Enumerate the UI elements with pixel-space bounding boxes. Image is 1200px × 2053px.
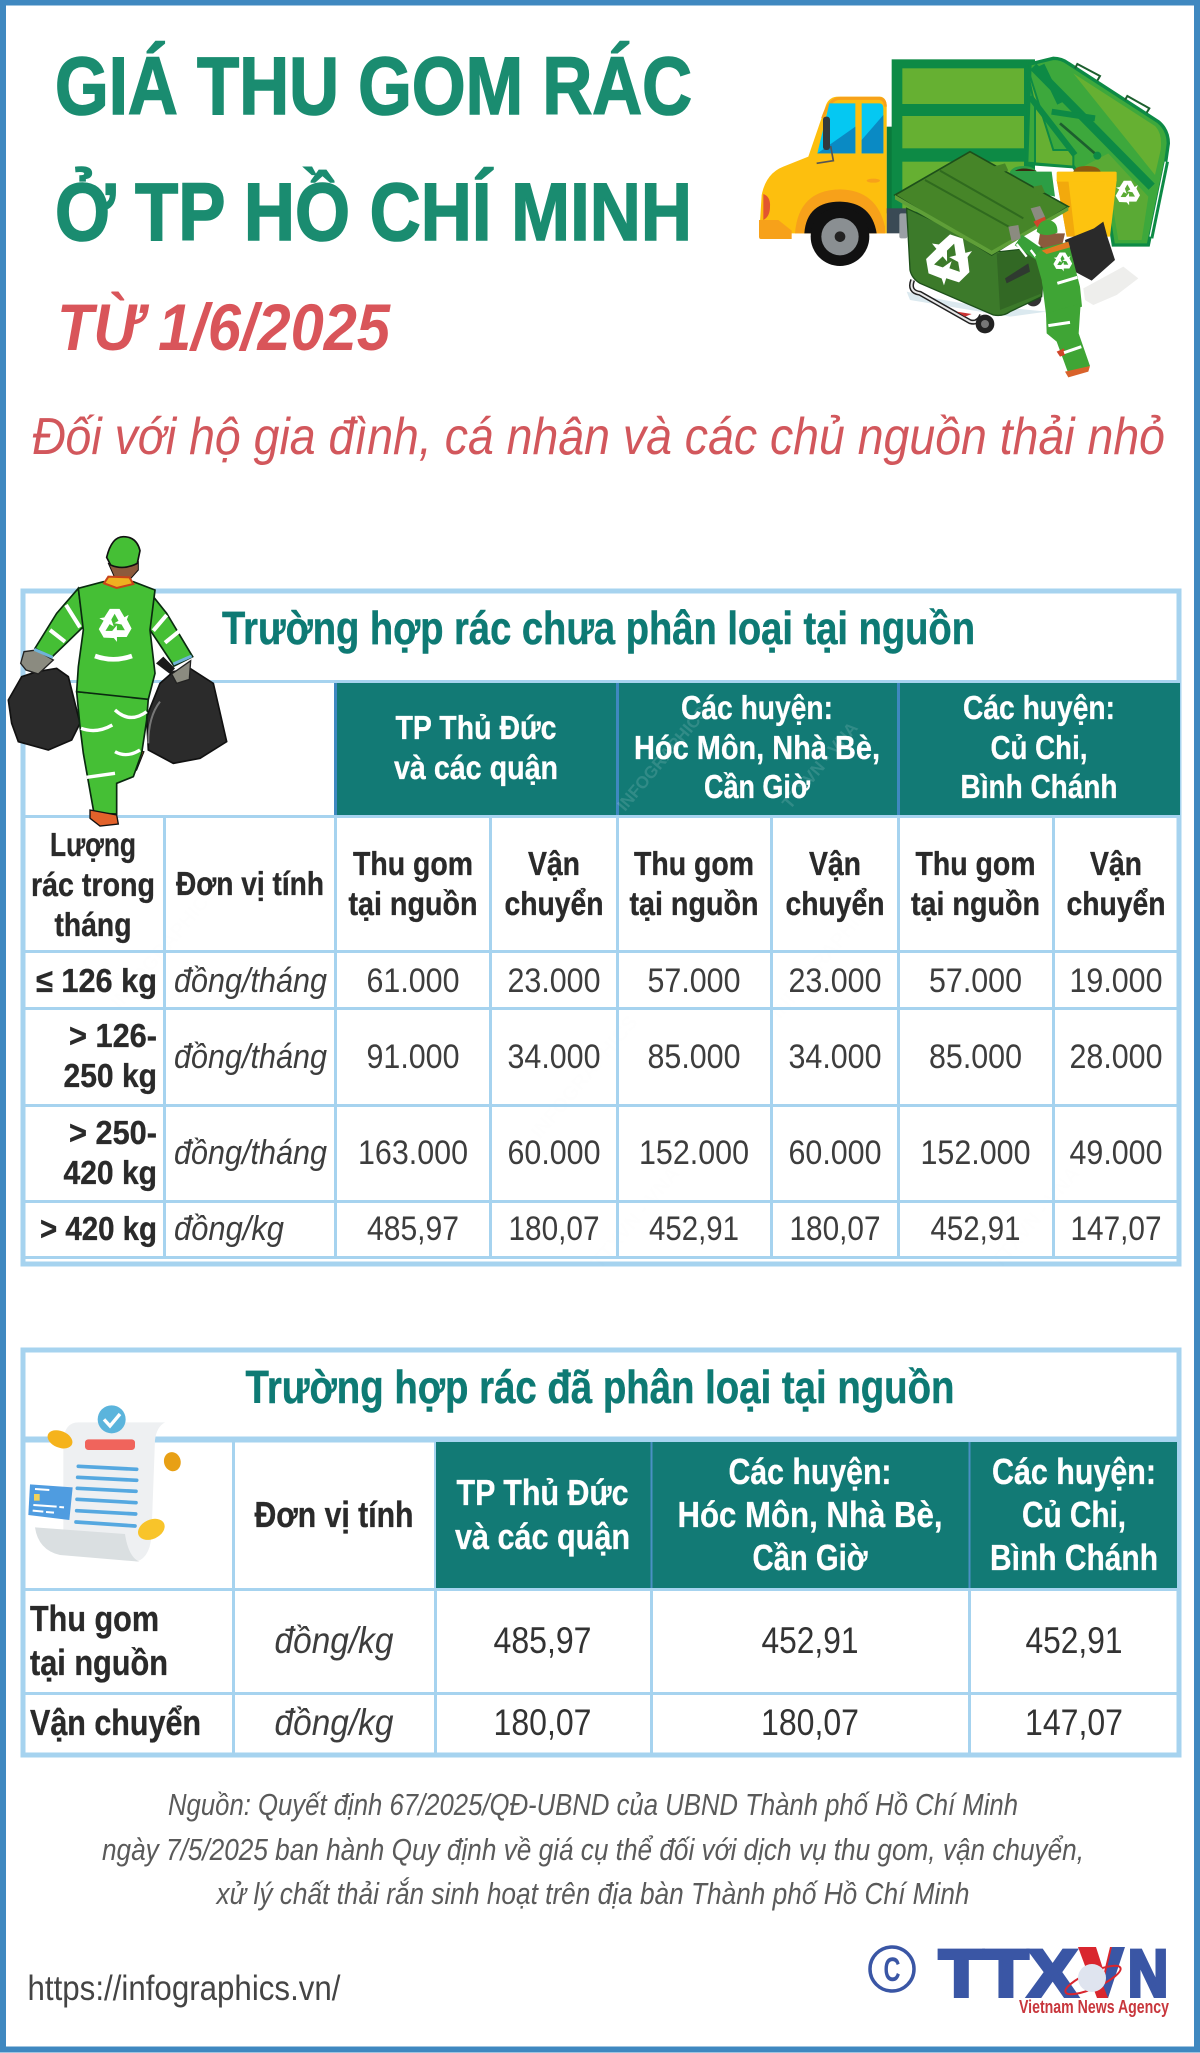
watermarks bbox=[107, 882, 1085, 1273]
source note: xử lý chất thải rắn sinh hoạt trên địa bàn Thành phố Hồ Chí Minh bbox=[215, 1876, 969, 1911]
row: 250 to 420 kg: > 250- bbox=[69, 1114, 157, 1151]
row: up to 126 kg: 23.000 bbox=[788, 962, 882, 1000]
row: 250 to 420 kg: 420 kg bbox=[64, 1154, 157, 1191]
illustration: worker carrying trash bags bbox=[8, 537, 227, 826]
row: up to 126 kg: 57.000 bbox=[929, 962, 1022, 1000]
table 1 sub headers: chuyển bbox=[1066, 885, 1166, 922]
table 1 heading: Trường hợp rác chưa phân loại tại nguồn bbox=[222, 602, 975, 654]
table 1 column headers: và các quận bbox=[394, 749, 558, 786]
table 1 sub headers: chuyển bbox=[504, 885, 604, 922]
row: over 420 kg: đồng/kg bbox=[174, 1210, 284, 1248]
watermarks: INFOGRAPHICS bbox=[107, 882, 222, 1013]
title: GIÁ THU GOM RÁC bbox=[55, 41, 692, 132]
table 1 sub headers: Vận bbox=[528, 845, 580, 882]
table 1 column headers: Hóc Môn, Nhà Bè, bbox=[634, 729, 880, 766]
title bbox=[55, 41, 692, 258]
source note: Nguồn: Quyết định 67/2025/QĐ-UBND của UBND Thành phố Hồ Chí Minh bbox=[168, 1787, 1018, 1822]
icon: receipt with coins and card bbox=[28, 1405, 183, 1562]
source note bbox=[102, 1787, 1084, 1911]
row: transport bbox=[30, 1702, 1123, 1743]
row: 250 to 420 kg: 163.000 bbox=[358, 1134, 468, 1172]
table 1 sub headers: Lượng bbox=[50, 826, 136, 863]
table 1 sub headers: tại nguồn bbox=[911, 885, 1040, 922]
table 2 column headers: Bình Chánh bbox=[990, 1537, 1158, 1578]
row: 126 to 250 kg: đồng/tháng bbox=[174, 1038, 327, 1076]
row: up to 126 kg: 23.000 bbox=[508, 962, 600, 1000]
illustration: garbage truck with worker and bin bbox=[759, 58, 1168, 377]
row: transport: 180,07 bbox=[761, 1702, 859, 1743]
row: 126 to 250 kg: 34.000 bbox=[508, 1038, 600, 1076]
logo: TTXVN bbox=[870, 1936, 1169, 2017]
table 2 heading: Trường hợp rác đã phân loại tại nguồn bbox=[246, 1361, 954, 1413]
table 1 sub headers: tại nguồn bbox=[630, 885, 758, 922]
table 1 column headers: Củ Chi, bbox=[990, 729, 1088, 766]
row: 250 to 420 kg bbox=[64, 1114, 1162, 1191]
row: collection at source: 452,91 bbox=[762, 1620, 858, 1661]
title: Ở TP HỒ CHÍ MINH bbox=[55, 167, 692, 258]
table 2 column headers: Các huyện: bbox=[728, 1451, 892, 1492]
website url: https://infographics.vn/ bbox=[28, 1969, 341, 2008]
table 1 sub headers: rác trong bbox=[31, 866, 155, 903]
table 1 sub headers: tháng bbox=[54, 906, 132, 943]
table 1 column headers: Cần Giờ bbox=[704, 768, 810, 805]
table 1 sub headers: Thu gom bbox=[916, 845, 1036, 882]
row: over 420 kg: > 420 kg bbox=[40, 1210, 157, 1247]
table 2 column headers: Cần Giờ bbox=[752, 1537, 868, 1578]
row: transport: Vận chuyển bbox=[30, 1702, 201, 1743]
row: transport: 147,07 bbox=[1025, 1702, 1123, 1743]
table 1 sub headers: Vận bbox=[809, 845, 861, 882]
row: transport: 180,07 bbox=[494, 1702, 592, 1743]
table 2 column headers: Củ Chi, bbox=[1022, 1494, 1126, 1535]
row: collection at source: 452,91 bbox=[1026, 1620, 1122, 1661]
table 1 sub headers: chuyển bbox=[786, 885, 884, 922]
table 1 sub headers: Vận bbox=[1090, 845, 1142, 882]
table 1 sub headers: Thu gom bbox=[634, 845, 754, 882]
table 2 grid bbox=[23, 1440, 1179, 1753]
watermarks: INFOGRAPHICS bbox=[767, 892, 882, 1023]
table 2 column headers: TP Thủ Đức bbox=[456, 1472, 628, 1513]
row: 126 to 250 kg: 85.000 bbox=[929, 1038, 1022, 1076]
row: up to 126 kg: đồng/tháng bbox=[174, 962, 327, 1000]
table 1 column headers: Các huyện: bbox=[681, 689, 833, 726]
row: 126 to 250 kg: 34.000 bbox=[788, 1038, 882, 1076]
row: 126 to 250 kg bbox=[64, 1017, 1162, 1094]
row: transport: đồng/kg bbox=[274, 1702, 394, 1743]
row: over 420 kg: 180,07 bbox=[790, 1210, 880, 1248]
row: up to 126 kg: 19.000 bbox=[1070, 962, 1162, 1000]
table 2 column headers bbox=[436, 1442, 1177, 1588]
watermarks: INFOGRAPHICS bbox=[527, 1012, 642, 1143]
row: 250 to 420 kg: đồng/tháng bbox=[174, 1134, 327, 1172]
panel: sorted waste table bbox=[23, 1350, 1179, 1755]
date subtitle: TỪ 1/6/2025 bbox=[57, 290, 391, 364]
row: 126 to 250 kg: 28.000 bbox=[1070, 1038, 1162, 1076]
row: 250 to 420 kg: 60.000 bbox=[788, 1134, 882, 1172]
row: collection at source: đồng/kg bbox=[274, 1620, 394, 1661]
row: collection at source bbox=[30, 1598, 1122, 1683]
table 1 grid bbox=[23, 681, 1179, 1258]
row: 126 to 250 kg: 91.000 bbox=[366, 1038, 460, 1076]
row: 250 to 420 kg: 60.000 bbox=[508, 1134, 600, 1172]
row: 250 to 420 kg: 152.000 bbox=[639, 1134, 749, 1172]
watermarks: TTXVN - VNA bbox=[587, 1163, 685, 1273]
logo: TTXVN: N bbox=[1128, 1936, 1168, 2010]
table 1 column headers bbox=[335, 683, 1180, 815]
row: over 420 kg: 452,91 bbox=[649, 1210, 739, 1248]
table 1 sub headers: Thu gom bbox=[353, 845, 473, 882]
table 2 unit header: Đơn vị tính bbox=[254, 1494, 414, 1535]
row: over 420 kg: 147,07 bbox=[1070, 1210, 1162, 1248]
row: collection at source: tại nguồn bbox=[30, 1642, 168, 1683]
logo: TTXVN: TTX bbox=[939, 1936, 1077, 2010]
row: up to 126 kg bbox=[36, 962, 1162, 1000]
row: over 420 kg bbox=[40, 1210, 1162, 1248]
row: 250 to 420 kg: 49.000 bbox=[1070, 1134, 1162, 1172]
table 2 column headers: Các huyện: bbox=[992, 1451, 1156, 1492]
table 2 column headers: Hóc Môn, Nhà Bè, bbox=[678, 1494, 942, 1535]
table 1 column headers: Bình Chánh bbox=[960, 768, 1118, 805]
row: up to 126 kg: ≤ 126 kg bbox=[36, 962, 157, 999]
row: 250 to 420 kg: 152.000 bbox=[920, 1134, 1030, 1172]
row: collection at source: 485,97 bbox=[494, 1620, 592, 1661]
table 1 sub headers: Đơn vị tính bbox=[176, 865, 324, 902]
row: over 420 kg: 452,91 bbox=[930, 1210, 1020, 1248]
table 1 column headers: TP Thủ Đức bbox=[396, 709, 556, 746]
table 1 column headers: INFOGRAPHICS bbox=[614, 703, 712, 815]
row: collection at source: Thu gom bbox=[30, 1598, 159, 1639]
table 1 column headers: TTXVN - VNA bbox=[779, 719, 862, 813]
panel: unsorted waste table bbox=[23, 591, 1180, 1273]
logo: TTXVN: C bbox=[884, 1951, 900, 1989]
table 1 column headers: Các huyện: bbox=[963, 689, 1115, 726]
row: up to 126 kg: 57.000 bbox=[648, 962, 740, 1000]
row: over 420 kg: 180,07 bbox=[508, 1210, 600, 1248]
table 1 sub headers bbox=[31, 826, 1166, 943]
table 1 sub headers: tại nguồn bbox=[348, 885, 478, 922]
table 2 column headers: và các quận bbox=[455, 1516, 630, 1557]
row: 126 to 250 kg: > 126- bbox=[69, 1017, 157, 1054]
row: 126 to 250 kg: 85.000 bbox=[648, 1038, 740, 1076]
row: 126 to 250 kg: 250 kg bbox=[64, 1057, 157, 1094]
watermarks: TTXVN - VNA bbox=[987, 1163, 1085, 1273]
row: over 420 kg: 485,97 bbox=[367, 1210, 459, 1248]
row: up to 126 kg: 61.000 bbox=[366, 962, 460, 1000]
